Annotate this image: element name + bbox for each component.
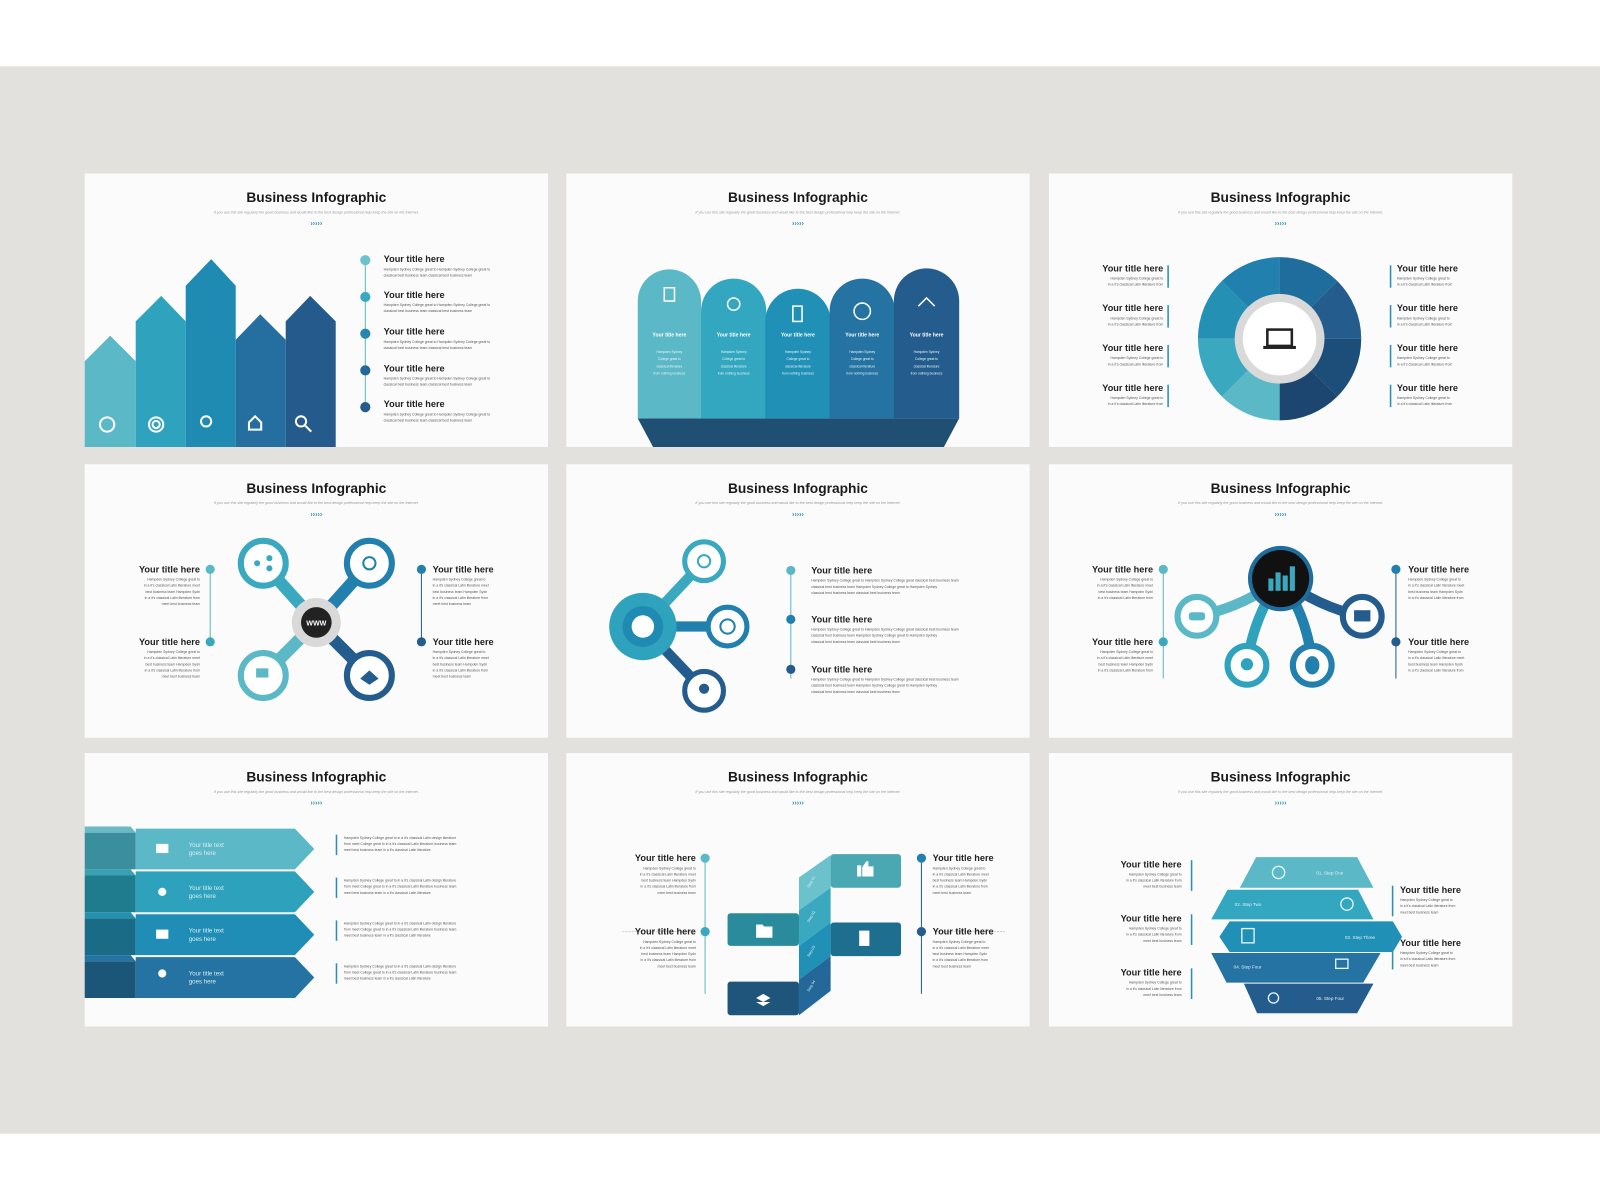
side texts: in a it's classical Latin literature from	[1397, 283, 1452, 287]
side texts	[139, 564, 494, 679]
slide 7 heading: If you use this site regularly the good business and would like to the best design professional help keep the site on the Internet.	[214, 790, 419, 794]
zigzag diagram	[728, 854, 901, 1015]
checklist: Your title here	[384, 327, 445, 337]
zigzag diagram: Step 02	[807, 910, 816, 923]
side texts: Hampden Sydney College great to	[933, 940, 986, 944]
side texts: in a it's classical Latin literature from	[1408, 668, 1464, 672]
side texts: in a it's classical Latin literature meet	[1408, 656, 1464, 660]
side texts: Your title here	[635, 927, 696, 937]
side texts: Hampden Sydney College great to	[1397, 396, 1450, 400]
hexagon stack	[1211, 857, 1402, 1013]
side texts: best business team Hampden Sydn	[933, 879, 987, 883]
slide 3 heading: If you use this site regularly the good business and would like to the best design professional help keep the site on the Internet.	[1178, 210, 1383, 214]
slide 8 heading: If you use this site regularly the good business and would like to the best design professional help keep the site on the Internet.	[695, 790, 901, 794]
side texts: Hampden Sydney College great to	[933, 866, 986, 870]
side texts: in a it's classical Latin literature from	[1400, 957, 1455, 961]
slide 9 heading	[1178, 770, 1383, 807]
side texts: Your title here	[433, 564, 494, 574]
side texts: in a it's classical Latin literature from	[1408, 596, 1464, 600]
3D arrow rows: Your title text	[189, 842, 224, 849]
checklist: classical best business team classical best business team	[384, 346, 472, 350]
side texts: best business team Hampden Sydn	[641, 879, 696, 883]
side texts: Your title here	[1092, 637, 1153, 647]
side texts: best business team Hampden Sydn	[145, 590, 200, 594]
side texts: Hampden Sydney College great to	[147, 650, 200, 654]
side texts	[622, 853, 1005, 994]
hexagon stack: 05. Step Four	[1316, 996, 1345, 1001]
tabs chart: Your title here	[652, 333, 686, 339]
side texts: Your title here	[1397, 383, 1458, 393]
checklist: Your title here	[384, 363, 445, 373]
side texts: Your title here	[933, 853, 994, 863]
slide 5 heading: If you use this site regularly the good business and would like to the best design professional help keep the site on the Internet.	[695, 501, 901, 505]
list: classical best business team Hampden Sydney College great to Hampden Sydney	[811, 684, 937, 688]
slide 4 heading: ›››››	[310, 510, 323, 518]
row texts: Hampden Sydney College great to in a it's classical Latin design literature	[344, 921, 456, 925]
checklist: Your title here	[384, 399, 445, 409]
side texts: meet best business team	[433, 675, 471, 679]
slide 8 heading: Business Infographic	[728, 770, 868, 785]
slide 4: cross of circles	[85, 464, 548, 738]
side texts: Hampden Sydney College great to	[433, 650, 486, 654]
side texts: in a it's classical Latin literature from	[1098, 596, 1153, 600]
row texts: Hampden Sydney College great to in a it's classical Latin design literature	[344, 836, 456, 840]
tabs chart	[638, 268, 959, 447]
side texts: in a it's classical Latin literature from	[1397, 402, 1452, 406]
side texts: in a it's classical Latin literature from	[1126, 987, 1182, 991]
side texts: in a it's classical Latin literature from	[1397, 323, 1452, 327]
checklist: Hampden Sydney College great to Hampden Sydney College great to	[384, 303, 490, 307]
3D arrow rows: Your title text	[189, 928, 224, 935]
list: Your title here	[811, 664, 872, 674]
slide 2 heading: ›››››	[792, 220, 805, 228]
slide 8: zigzag steps	[566, 753, 1030, 1027]
side texts: best business team Hampden Sydn	[641, 952, 696, 956]
side texts: Hampden Sydney College great to	[643, 866, 696, 870]
side texts	[1102, 263, 1458, 407]
checklist: Hampden Sydney College great to Hampden Sydney College great to	[384, 340, 490, 344]
list: classical best business team classical best business team	[811, 690, 900, 694]
side texts: in a it's classical Latin literature meet	[1097, 584, 1153, 588]
side texts: in a it's classical Latin literature from	[1108, 283, 1163, 287]
side texts: meet best business team	[433, 602, 471, 606]
side texts: in a it's classical Latin literature from	[641, 958, 696, 962]
slide 6 heading	[1178, 481, 1383, 518]
slide 2 heading: Business Infographic	[728, 190, 868, 205]
3D arrow rows: goes here	[189, 936, 217, 943]
slide 3 heading: Business Infographic	[1211, 190, 1351, 205]
slide 3: donut	[1049, 173, 1512, 447]
checklist: classical best business team classical best business team	[384, 418, 472, 422]
3D arrow rows	[85, 827, 314, 998]
tabs chart: Hampden Sydney	[849, 350, 876, 354]
tabs chart: College great to	[786, 357, 810, 361]
side texts: Your title here	[635, 853, 696, 863]
3D arrow rows: goes here	[189, 893, 217, 900]
side texts: Hampden Sydney College great to	[1129, 981, 1182, 985]
slide 1 heading	[214, 190, 419, 228]
row texts: from meet College great to in a it's classical Latin literature business team	[344, 970, 457, 974]
donut chart	[1198, 257, 1361, 420]
slide 6 heading: If you use this site regularly the good business and would like to the best design professional help keep the site on the Internet.	[1178, 501, 1383, 505]
side texts: Your title here	[1121, 913, 1182, 923]
checklist: classical best business team classical best business team	[384, 383, 472, 387]
tabs chart: Hampden Sydney	[656, 350, 683, 354]
slide 2 heading	[695, 190, 901, 228]
side texts: Hampden Sydney College great to	[1100, 578, 1153, 582]
slide 8 heading: ›››››	[792, 799, 805, 807]
slide 4 heading: Business Infographic	[246, 481, 387, 496]
side texts: Your title here	[1397, 343, 1458, 353]
side texts: Your title here	[433, 637, 494, 647]
zigzag diagram: Step 01	[807, 876, 816, 888]
side texts: meet best business team	[1143, 885, 1182, 889]
side texts: meet best business team	[933, 891, 971, 895]
side texts: Your title here	[139, 637, 200, 647]
slide 7 heading: Business Infographic	[246, 770, 387, 785]
slide 6: tree of circles	[1049, 464, 1512, 738]
slide 1 heading: Business Infographic	[246, 190, 387, 205]
side texts: in a it's classical Latin literature meet	[933, 946, 989, 950]
side texts: in a it's classical Latin literature meet	[640, 946, 696, 950]
cross diagram	[241, 541, 392, 698]
slide 8 heading	[695, 770, 901, 807]
side texts: in a it's classical Latin literature from	[1126, 879, 1182, 883]
checklist: Your title here	[384, 290, 445, 300]
tabs chart: College great to	[851, 357, 874, 361]
side texts: meet best business team	[1400, 963, 1439, 967]
3D arrow rows: goes here	[189, 979, 217, 986]
slide 5: hub and branches	[566, 464, 1030, 738]
side texts: meet best business team	[658, 891, 696, 895]
side texts: in a it's classical Latin literature from	[433, 668, 488, 672]
checklist: Your title here	[384, 254, 445, 264]
tabs chart: from nothing business	[718, 371, 750, 375]
side texts: Your title here	[1102, 263, 1163, 273]
tabs chart: College great to	[658, 357, 681, 361]
side texts: Your title here	[1397, 263, 1458, 273]
side texts: meet best business team	[933, 964, 971, 968]
side texts: Hampden Sydney College great to	[1397, 356, 1450, 360]
tabs chart: classical literature	[656, 364, 682, 368]
side texts: Your title here	[1121, 968, 1182, 978]
hexagon stack: 03. Step Three	[1345, 935, 1376, 940]
side texts: best business team Hampden Sydn	[1099, 590, 1153, 594]
slide 3 heading: ›››››	[1275, 220, 1287, 228]
side texts: meet best business team	[658, 964, 696, 968]
side texts: in a it's classical Latin literature meet	[433, 656, 489, 660]
slide 9: hexagon steps	[1049, 753, 1512, 1027]
hexagon stack: 02. Step Two	[1235, 902, 1262, 907]
side texts: in a it's classical Latin literature from	[1108, 323, 1163, 327]
tabs chart: Your title here	[781, 333, 815, 339]
list: classical best business team classical best business team	[811, 640, 900, 644]
tabs chart: Hampden Sydney	[721, 350, 747, 354]
side texts: best business team Hampden Sydn	[1408, 590, 1463, 594]
3D arrow rows: Your title text	[189, 971, 224, 978]
side texts: meet best business team	[1143, 993, 1182, 997]
side texts: Your title here	[1408, 637, 1469, 647]
tabs chart: Hampden Sydney	[914, 350, 940, 354]
side texts: in a it's classical Latin literature from	[145, 668, 200, 672]
slide 7 heading: ›››››	[310, 799, 323, 807]
side texts: Your title here	[1400, 938, 1461, 948]
tabs chart: from nothing business	[782, 371, 814, 375]
slide 9 heading: If you use this site regularly the good business and would like to the best design professional help keep the site on the Internet.	[1178, 790, 1383, 794]
checklist: classical best business team classical best business team	[384, 309, 472, 313]
tabs chart: College great to	[722, 357, 745, 361]
list: Hampden Sydney College great to Hampden Sydney College great classical best business team	[811, 628, 959, 632]
list: Hampden Sydney College great to Hampden Sydney College great classical best business team	[811, 579, 959, 583]
tabs chart: from nothing business	[911, 371, 943, 375]
tabs chart: Your title here	[717, 333, 751, 339]
side texts: Hampden Sydney College great to	[1129, 873, 1182, 877]
tabs chart: from nothing business	[846, 371, 879, 375]
row texts: from meet College great to in a it's classical Latin literature business team	[344, 885, 457, 889]
side texts: in a it's classical Latin literature from	[933, 958, 988, 962]
row texts: Hampden Sydney College great to in a it's classical Latin design literature	[344, 964, 456, 968]
side texts	[1092, 564, 1469, 679]
side texts: Hampden Sydney College great to	[1110, 316, 1163, 320]
tabs chart: classical literature	[721, 364, 747, 368]
slide 7: 3D arrows	[85, 753, 548, 1027]
row texts: Hampden Sydney College great to in a it's classical Latin design literature	[344, 879, 456, 883]
side texts: Hampden Sydney College great to	[643, 940, 696, 944]
side texts: Hampden Sydney College great to	[1400, 951, 1453, 955]
tabs chart: Your title here	[845, 333, 879, 339]
side texts: Hampden Sydney College great to	[1110, 356, 1163, 360]
side texts: in a it's classical Latin literature meet	[933, 873, 989, 877]
hexagon stack: 04. Step Four	[1234, 964, 1262, 969]
tabs chart: Your title here	[910, 333, 944, 339]
slide 9 heading: ›››››	[1275, 799, 1287, 807]
side texts: Hampden Sydney College great to	[1397, 277, 1450, 281]
side texts: in a it's classical Latin literature meet	[144, 656, 200, 660]
list	[786, 565, 959, 694]
branch diagram	[609, 542, 747, 710]
side texts: in a it's classical Latin literature meet	[433, 584, 489, 588]
side texts: Hampden Sydney College great to	[1129, 927, 1182, 931]
list: classical best business team Hampden Sydney College great to Hampden Sydney	[811, 585, 937, 589]
slide 9 heading: Business Infographic	[1211, 770, 1351, 785]
slide 7 heading	[214, 770, 419, 807]
side texts: Hampden Sydney College great to	[147, 578, 200, 582]
side texts: Hampden Sydney College great to	[1110, 277, 1163, 281]
arrow bars chart	[85, 259, 336, 447]
row texts: meet best business team in a it's classical Latin literature	[344, 848, 431, 852]
side texts: Your title here	[1102, 343, 1163, 353]
slide 2: tabs	[566, 173, 1030, 447]
slide 3 heading	[1178, 190, 1383, 228]
checklist: Hampden Sydney College great to Hampden Sydney College great to	[384, 377, 490, 381]
tabs chart: classical literature	[849, 364, 875, 368]
slide 6 heading: ›››››	[1275, 510, 1287, 518]
slide 1: arrow bars	[85, 173, 548, 447]
side texts: Your title here	[1092, 564, 1153, 574]
side texts: best business team Hampden Sydn	[1408, 662, 1463, 666]
list: Hampden Sydney College great to Hampden Sydney College great classical best business team	[811, 678, 959, 682]
checklist: classical best business team classical best business team	[384, 274, 472, 278]
slide 5 heading: Business Infographic	[728, 481, 868, 496]
side texts: Your title here	[139, 564, 200, 574]
slide 1 heading: If you use this site regularly the good business and would like to the best design professional help keep the site on the Internet.	[214, 210, 419, 214]
side texts: in a it's classical Latin literature meet	[1408, 584, 1464, 588]
row texts	[336, 835, 457, 984]
checklist: Hampden Sydney College great to Hampden Sydney College great to	[384, 412, 490, 416]
side texts: in a it's classical Latin literature from	[433, 596, 488, 600]
side texts: best business team Hampden Sydn	[433, 662, 487, 666]
slide 2 heading: If you use this site regularly the good business and would like to the best design professional help keep the site on the Internet.	[695, 210, 901, 214]
side texts: in a it's classical Latin literature from	[1126, 933, 1182, 937]
row texts: from meet College great to in a it's classical Latin literature business team	[344, 842, 457, 846]
slide 5 heading: ›››››	[792, 510, 805, 518]
side texts: Your title here	[1397, 303, 1458, 313]
side texts: in a it's classical Latin literature from	[1108, 402, 1163, 406]
3D arrow rows: Your title text	[189, 885, 224, 892]
slide 1 heading: ›››››	[310, 220, 323, 228]
side texts: in a it's classical Latin literature from	[145, 596, 200, 600]
tabs chart: College great to	[915, 357, 938, 361]
side texts: Your title here	[1121, 859, 1182, 869]
tabs chart: from nothing business	[653, 371, 686, 375]
tabs chart: classical literature	[785, 364, 811, 368]
slide 4 heading	[214, 481, 419, 518]
side texts: in a it's classical Latin literature from	[933, 885, 988, 889]
side texts: in a it's classical Latin literature from	[641, 885, 696, 889]
side texts: in a it's classical Latin literature meet	[640, 873, 696, 877]
side texts: meet best business team	[162, 675, 200, 679]
tree diagram	[1178, 546, 1382, 685]
side texts: Your title here	[933, 927, 994, 937]
side texts: Hampden Sydney College great to	[1400, 898, 1453, 902]
side texts: best business team Hampden Sydn	[433, 590, 487, 594]
row texts: meet best business team in a it's classical Latin literature	[344, 934, 431, 938]
row texts: meet best business team in a it's classical Latin literature	[344, 891, 431, 895]
side texts: in a it's classical Latin literature from	[1397, 362, 1452, 366]
side texts: in a it's classical Latin literature from	[1098, 668, 1153, 672]
side texts: in a it's classical Latin literature from	[1108, 362, 1163, 366]
hexagon stack: 01. Step One	[1316, 870, 1344, 875]
list: Your title here	[811, 614, 872, 624]
side texts: meet best business team	[1400, 910, 1439, 914]
side texts: in a it's classical Latin literature meet	[144, 584, 200, 588]
side texts: Hampden Sydney College great to	[433, 578, 486, 582]
side texts: best business team Hampden Sydn	[1099, 662, 1153, 666]
side texts: best business team Hampden Sydn	[145, 662, 200, 666]
side texts	[1121, 859, 1461, 999]
tabs chart: Hampden Sydney	[785, 350, 811, 354]
side texts: Hampden Sydney College great to	[1397, 316, 1450, 320]
side texts: Your title here	[1102, 303, 1163, 313]
side texts: best business team Hampden Sydn	[933, 952, 987, 956]
slide 4 heading: If you use this site regularly the good business and would like to the best design professional help keep the site on the Internet.	[214, 501, 419, 505]
side texts: meet best business team	[1143, 939, 1182, 943]
row texts: from meet College great to in a it's classical Latin literature business team	[344, 928, 457, 932]
side texts: Hampden Sydney College great to	[1408, 578, 1461, 582]
side texts: Your title here	[1400, 885, 1461, 895]
zigzag diagram: Step 04	[807, 980, 816, 992]
side texts: Your title here	[1408, 564, 1469, 574]
side texts: in a it's classical Latin literature meet	[1097, 656, 1153, 660]
3D arrow rows: goes here	[189, 850, 217, 857]
slide 6 heading: Business Infographic	[1211, 481, 1351, 496]
side texts: Hampden Sydney College great to	[1110, 396, 1163, 400]
list: classical best business team Hampden Sydney College great to Hampden Sydney	[811, 634, 937, 638]
side texts: in a it's classical Latin literature from	[1400, 904, 1455, 908]
list: classical best business team classical best business team	[811, 591, 900, 595]
tabs chart: classical literature	[914, 364, 940, 368]
cross diagram: WWW	[306, 620, 327, 628]
side texts: meet best business team	[162, 602, 200, 606]
side texts: Hampden Sydney College great to	[1408, 650, 1461, 654]
checklist: Hampden Sydney College great to Hampden Sydney College great to	[384, 267, 490, 271]
side texts: Hampden Sydney College great to	[1100, 650, 1153, 654]
list: Your title here	[811, 565, 872, 575]
zigzag diagram: Step 03	[807, 945, 816, 958]
checklist	[360, 254, 490, 422]
row texts: meet best business team in a it's classical Latin literature	[344, 977, 431, 981]
slide 5 heading	[695, 481, 901, 518]
side texts: Your title here	[1102, 383, 1163, 393]
